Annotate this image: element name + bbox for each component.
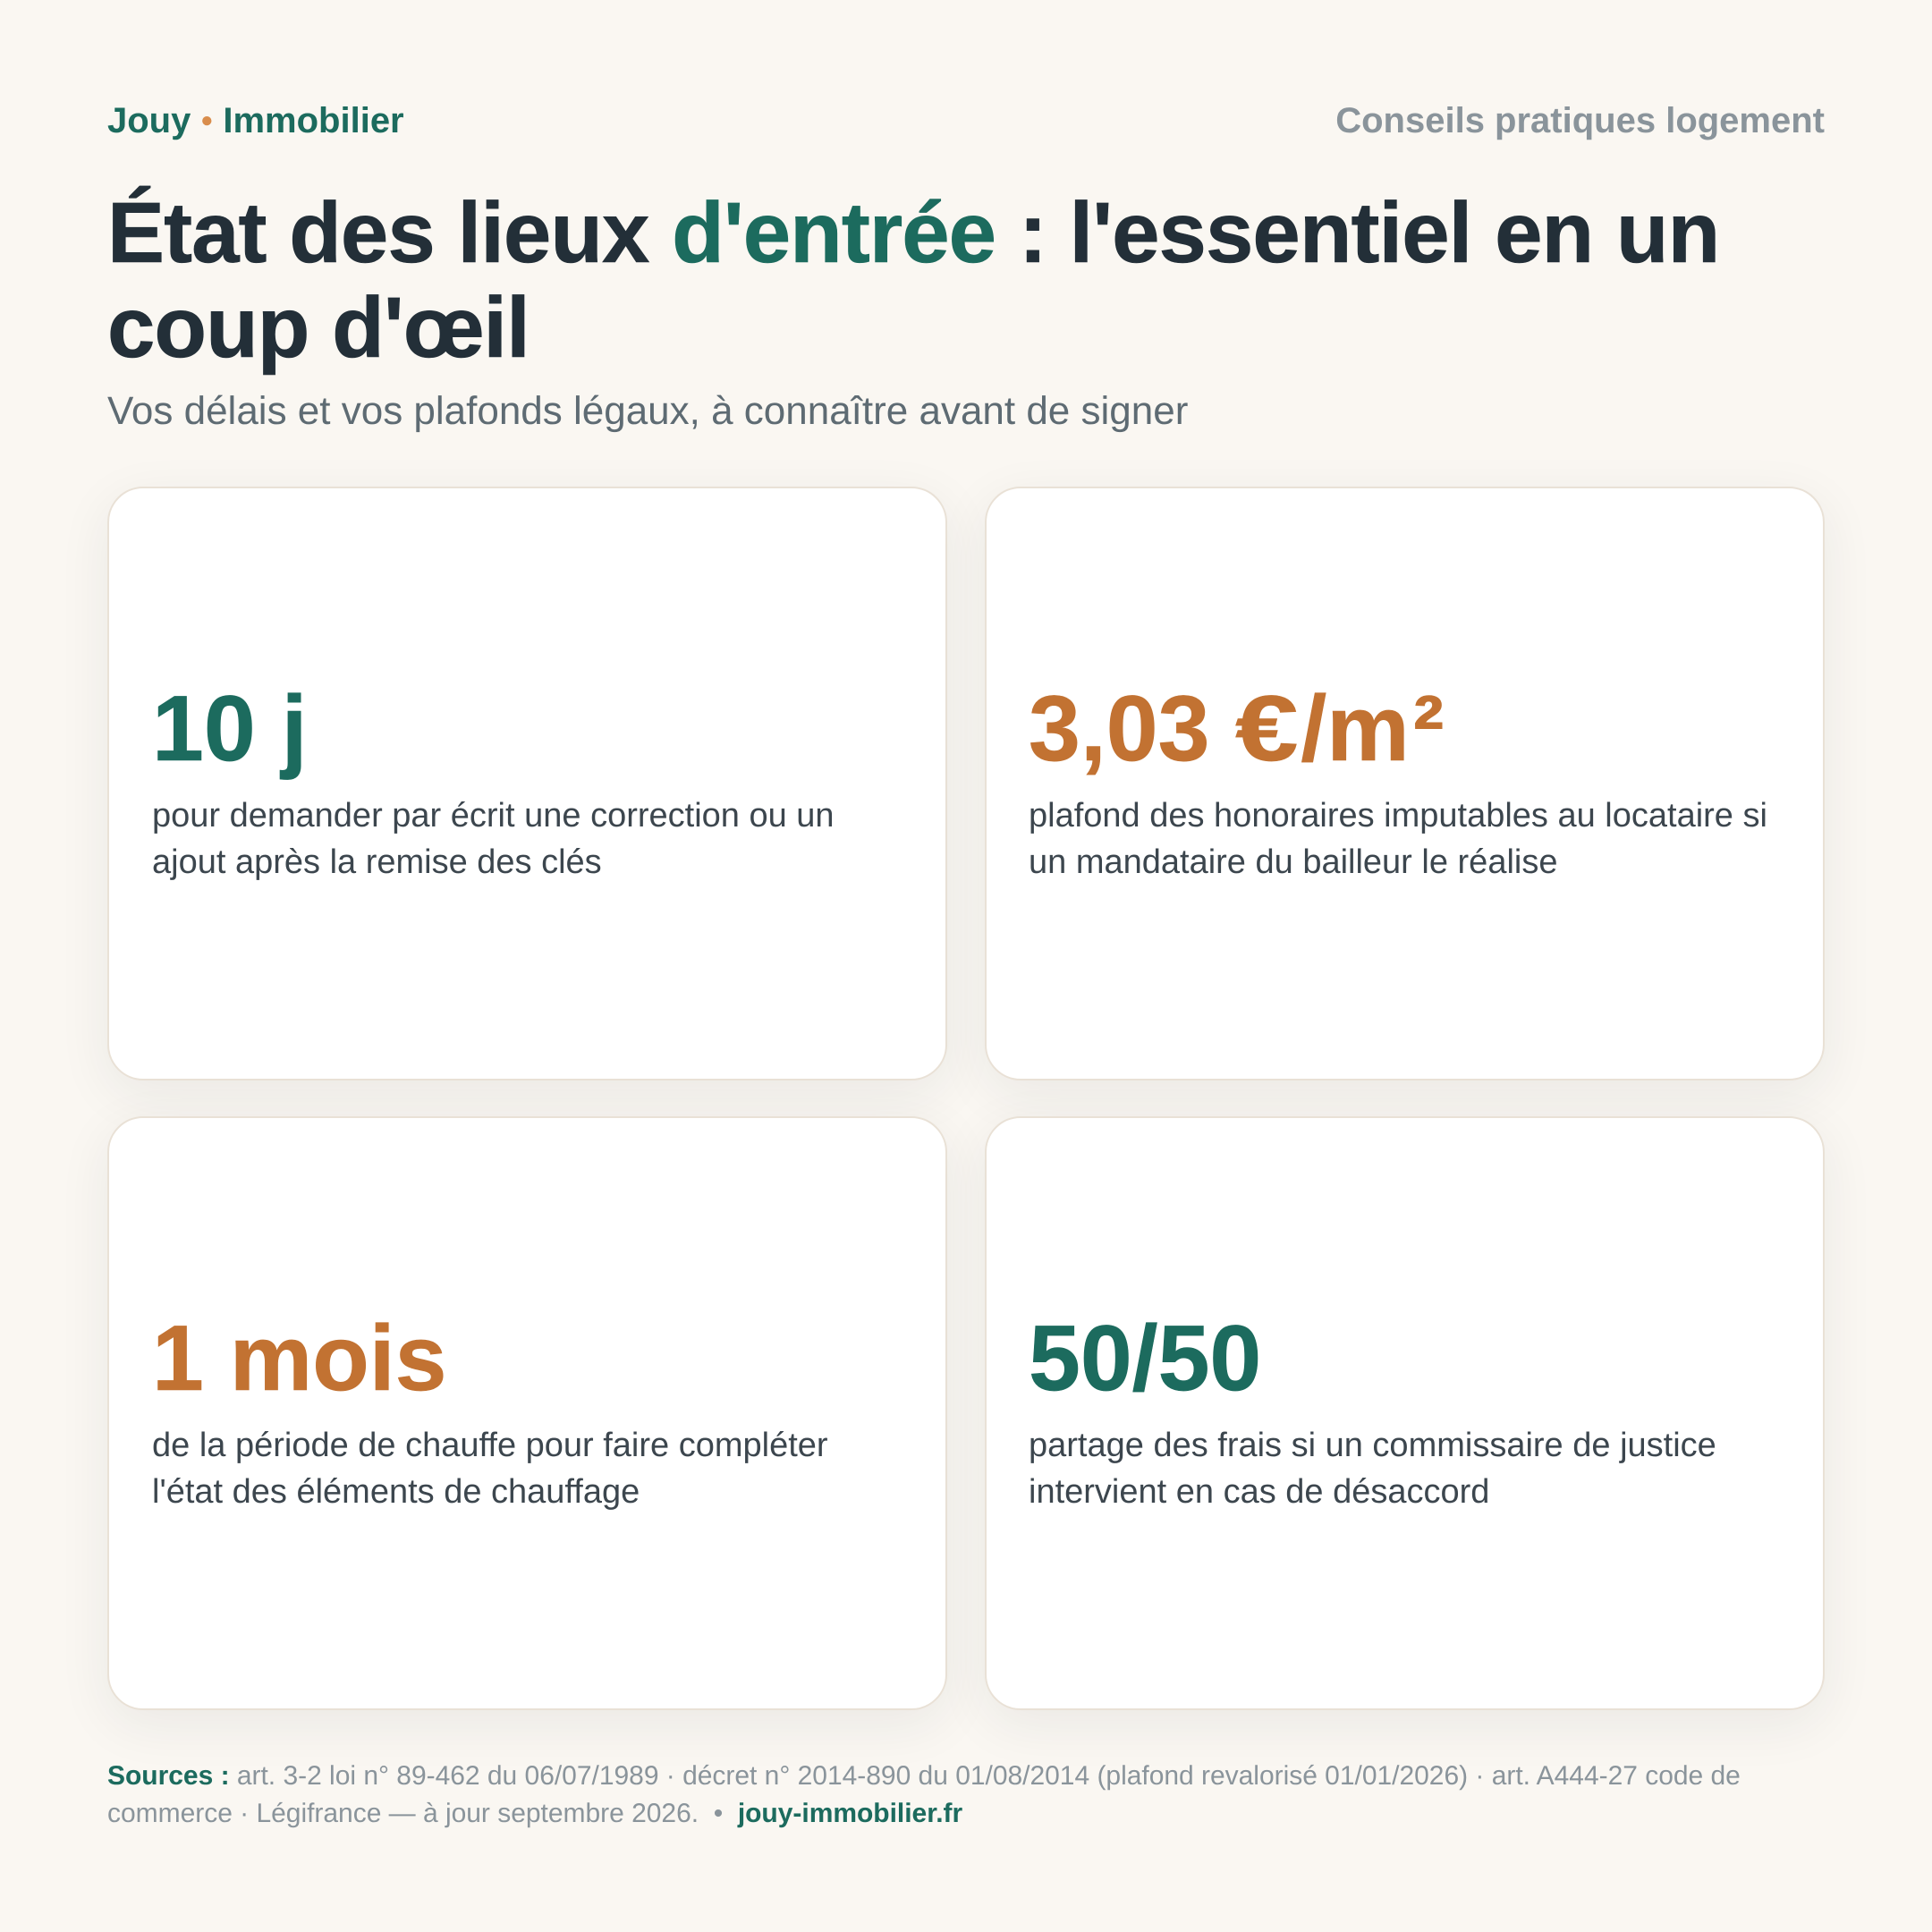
stat description: ajout après la remise des clés bbox=[152, 843, 602, 881]
header tag: Conseils pratiques logement bbox=[1335, 101, 1825, 140]
stat number: 1 mois bbox=[152, 1307, 446, 1411]
brand: • bbox=[201, 102, 213, 139]
stat description: un mandataire du bailleur le réalise bbox=[1029, 843, 1557, 881]
stat description bbox=[152, 1427, 828, 1511]
title: État des lieux d'entrée : l'essentiel en un bbox=[107, 185, 1719, 281]
stat description: l'état des éléments de chauffage bbox=[152, 1473, 640, 1511]
card: 1 mois bbox=[107, 1116, 947, 1710]
sources footer bbox=[107, 1761, 1741, 1828]
stat description bbox=[1029, 797, 1767, 881]
card: 50/50 bbox=[985, 1116, 1825, 1710]
stat number: € bbox=[1235, 677, 1299, 781]
stat description: intervient en cas de désaccord bbox=[1029, 1473, 1489, 1511]
subtitle: Vos délais et vos plafonds légaux, à connaître avant de signer bbox=[107, 389, 1188, 433]
sources footer: Sources : art. 3-2 loi n° 89-462 du 06/07/1989 · décret n° 2014-890 du 01/08/2014 (plafond revalorisé 01/01/2026) · art. A444-27 code de bbox=[107, 1761, 1741, 1791]
stat description bbox=[1029, 1427, 1716, 1511]
stat description: plafond des honoraires imputables au locataire si bbox=[1029, 797, 1767, 835]
brand: Jouy Immobilier bbox=[107, 101, 404, 140]
stat description bbox=[152, 797, 835, 881]
stat number: 50/50 bbox=[1029, 1307, 1261, 1411]
stat number: 3,03 /m² bbox=[1029, 677, 1444, 781]
stat description: de la période de chauffe pour faire compléter bbox=[152, 1427, 828, 1464]
stat description: partage des frais si un commissaire de justice bbox=[1029, 1427, 1716, 1464]
card: 3,03 €/m² bbox=[985, 487, 1825, 1080]
stat description: pour demander par écrit une correction ou un bbox=[152, 797, 835, 835]
card: 10 j bbox=[107, 487, 947, 1080]
title bbox=[107, 185, 1719, 376]
sources footer: commerce · Légifrance — à jour septembre 2026. • jouy-immobilier.fr bbox=[107, 1799, 962, 1828]
stat number: 10 j bbox=[152, 677, 307, 781]
title: coup d'œil bbox=[107, 280, 530, 376]
